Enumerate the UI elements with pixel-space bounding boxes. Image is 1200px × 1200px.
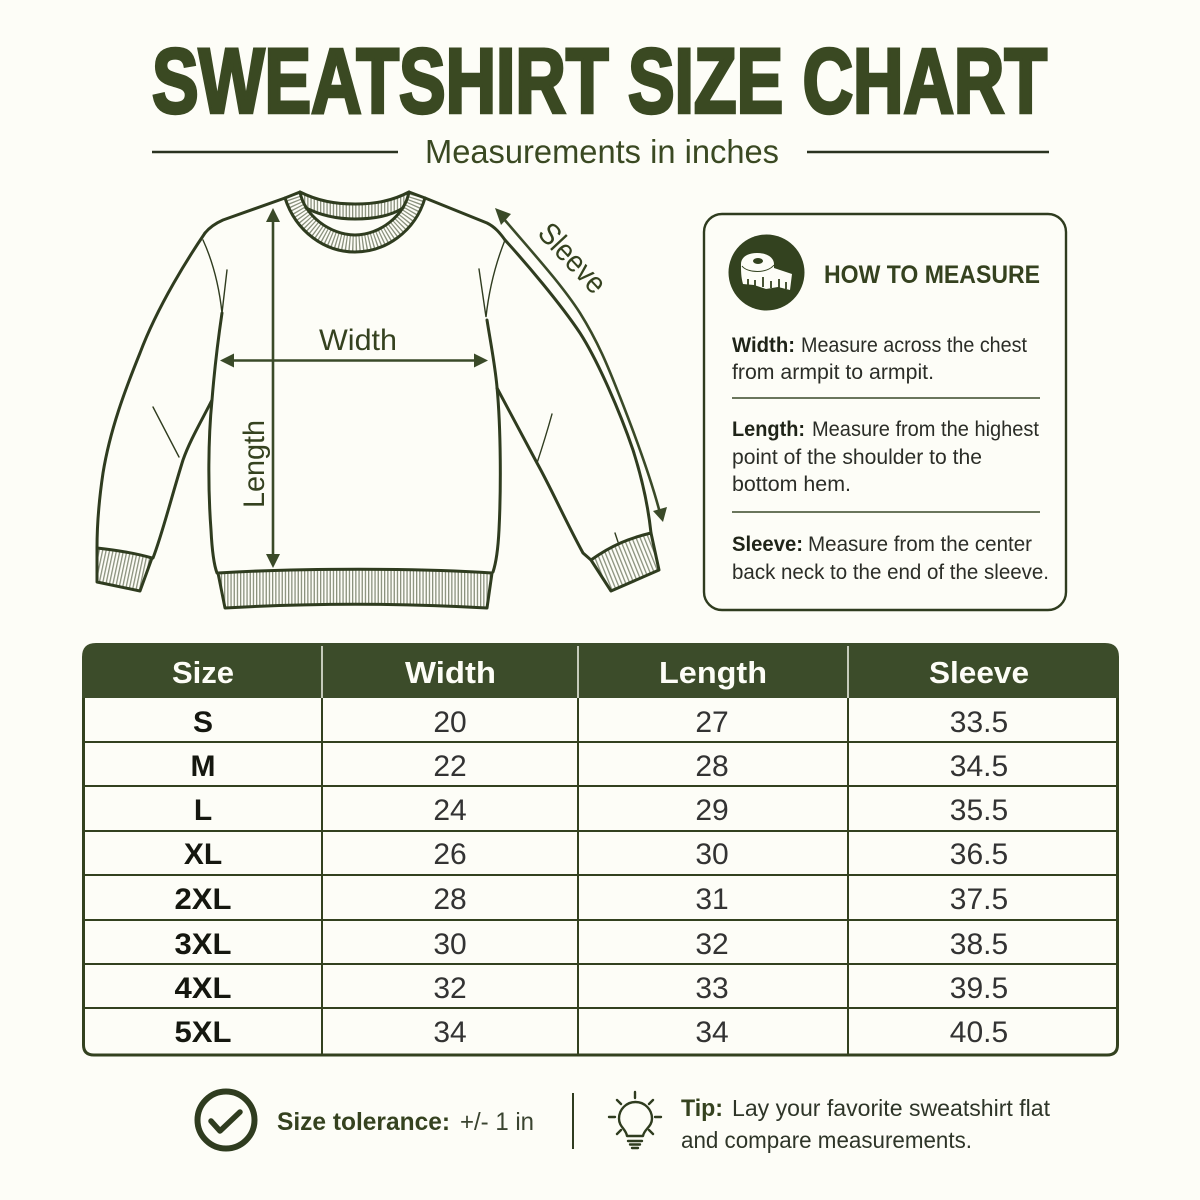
row: L [194, 794, 1008, 827]
row: 5XL: 5XL [174, 1016, 232, 1049]
size table [82, 643, 1119, 1055]
row: M: M [190, 750, 216, 783]
row: L: L [194, 794, 212, 827]
table header: Width [405, 655, 496, 690]
panel heading: HOW TO MEASURE [824, 261, 1040, 289]
row: S [193, 706, 1008, 739]
hem [218, 569, 492, 608]
row: M: 22 [433, 750, 467, 783]
row: 4XL: 4XL [174, 972, 232, 1005]
label: sleeve: Sleeve [531, 217, 613, 300]
tip note: and compare measurements. [681, 1127, 972, 1153]
subtitle: Measurements in inches [425, 133, 779, 170]
icon: tape measure [728, 234, 804, 310]
tip note: Tip: [681, 1095, 723, 1122]
tip note: Lay your favorite sweatshirt flat [732, 1095, 1051, 1121]
row: L: 29 [695, 794, 729, 827]
text: width: Width: [732, 334, 795, 357]
icon: check circle [198, 1092, 254, 1148]
size tolerance note: +/- 1 in [460, 1108, 534, 1136]
text: length: Length: [732, 418, 805, 441]
row: 3XL: 32 [695, 928, 729, 961]
text: length: bottom hem. [732, 473, 851, 496]
row: S: 20 [433, 706, 467, 739]
text: length: point of the shoulder to the [732, 446, 982, 469]
sweatshirt diagram [97, 192, 659, 608]
arrow: length [266, 208, 280, 568]
arrow: sleeve [495, 208, 667, 522]
row: 3XL: 30 [433, 928, 467, 961]
tip note [681, 1095, 1051, 1153]
row: S: 27 [695, 706, 729, 739]
label: width: Width [319, 324, 397, 357]
left sleeve [97, 233, 212, 591]
collar [285, 192, 425, 252]
row: 2XL: 2XL [174, 883, 232, 916]
table header: Sleeve [929, 655, 1029, 690]
row: 5XL: 40.5 [950, 1016, 1008, 1049]
text: sleeve: back neck to the end of the sleeve. [732, 561, 1049, 584]
row: M: 34.5 [950, 750, 1008, 783]
row: L: 24 [433, 794, 467, 827]
row: 2XL: 37.5 [950, 883, 1008, 916]
row: 5XL [174, 1016, 1008, 1049]
label: length: Length [238, 420, 271, 508]
text: sleeve: Measure from the center [808, 533, 1032, 556]
row: 4XL: 32 [433, 972, 467, 1005]
body outline [203, 198, 505, 573]
panel: how to measure [704, 214, 1066, 610]
row: 4XL: 39.5 [950, 972, 1008, 1005]
row: M [190, 750, 1008, 783]
row: 2XL: 28 [433, 883, 467, 916]
text: sleeve: Sleeve: [732, 533, 803, 556]
row: 5XL: 34 [695, 1016, 729, 1049]
text: width [732, 334, 1027, 384]
row: M: 28 [695, 750, 729, 783]
row: 2XL: 31 [695, 883, 729, 916]
row: 4XL [174, 972, 1008, 1005]
arrow: width [220, 354, 488, 368]
row: XL [184, 838, 1008, 871]
table header: Length [659, 655, 767, 690]
row: XL: XL [184, 838, 222, 871]
row: 5XL: 34 [433, 1016, 467, 1049]
text: length [732, 418, 1039, 496]
row: XL: 26 [433, 838, 467, 871]
size tolerance note [277, 1108, 534, 1136]
row: S: 33.5 [950, 706, 1008, 739]
right sleeve [497, 240, 659, 591]
row: 4XL: 33 [695, 972, 729, 1005]
row: 3XL: 38.5 [950, 928, 1008, 961]
table header [82, 643, 1119, 698]
text: width: from armpit to armpit. [732, 361, 934, 384]
size tolerance note: Size tolerance: [277, 1108, 450, 1136]
table header: Size [172, 655, 234, 690]
row: L: 35.5 [950, 794, 1008, 827]
row: 3XL: 3XL [174, 928, 232, 961]
row: 2XL [174, 883, 1008, 916]
text: sleeve [732, 533, 1049, 584]
row: 3XL [174, 928, 1008, 961]
row: XL: 30 [695, 838, 729, 871]
icon: light bulb [609, 1092, 661, 1148]
text: length: Measure from the highest [812, 418, 1039, 441]
row: XL: 36.5 [950, 838, 1008, 871]
row: S: S [193, 706, 213, 739]
text: width: Measure across the chest [801, 334, 1027, 357]
